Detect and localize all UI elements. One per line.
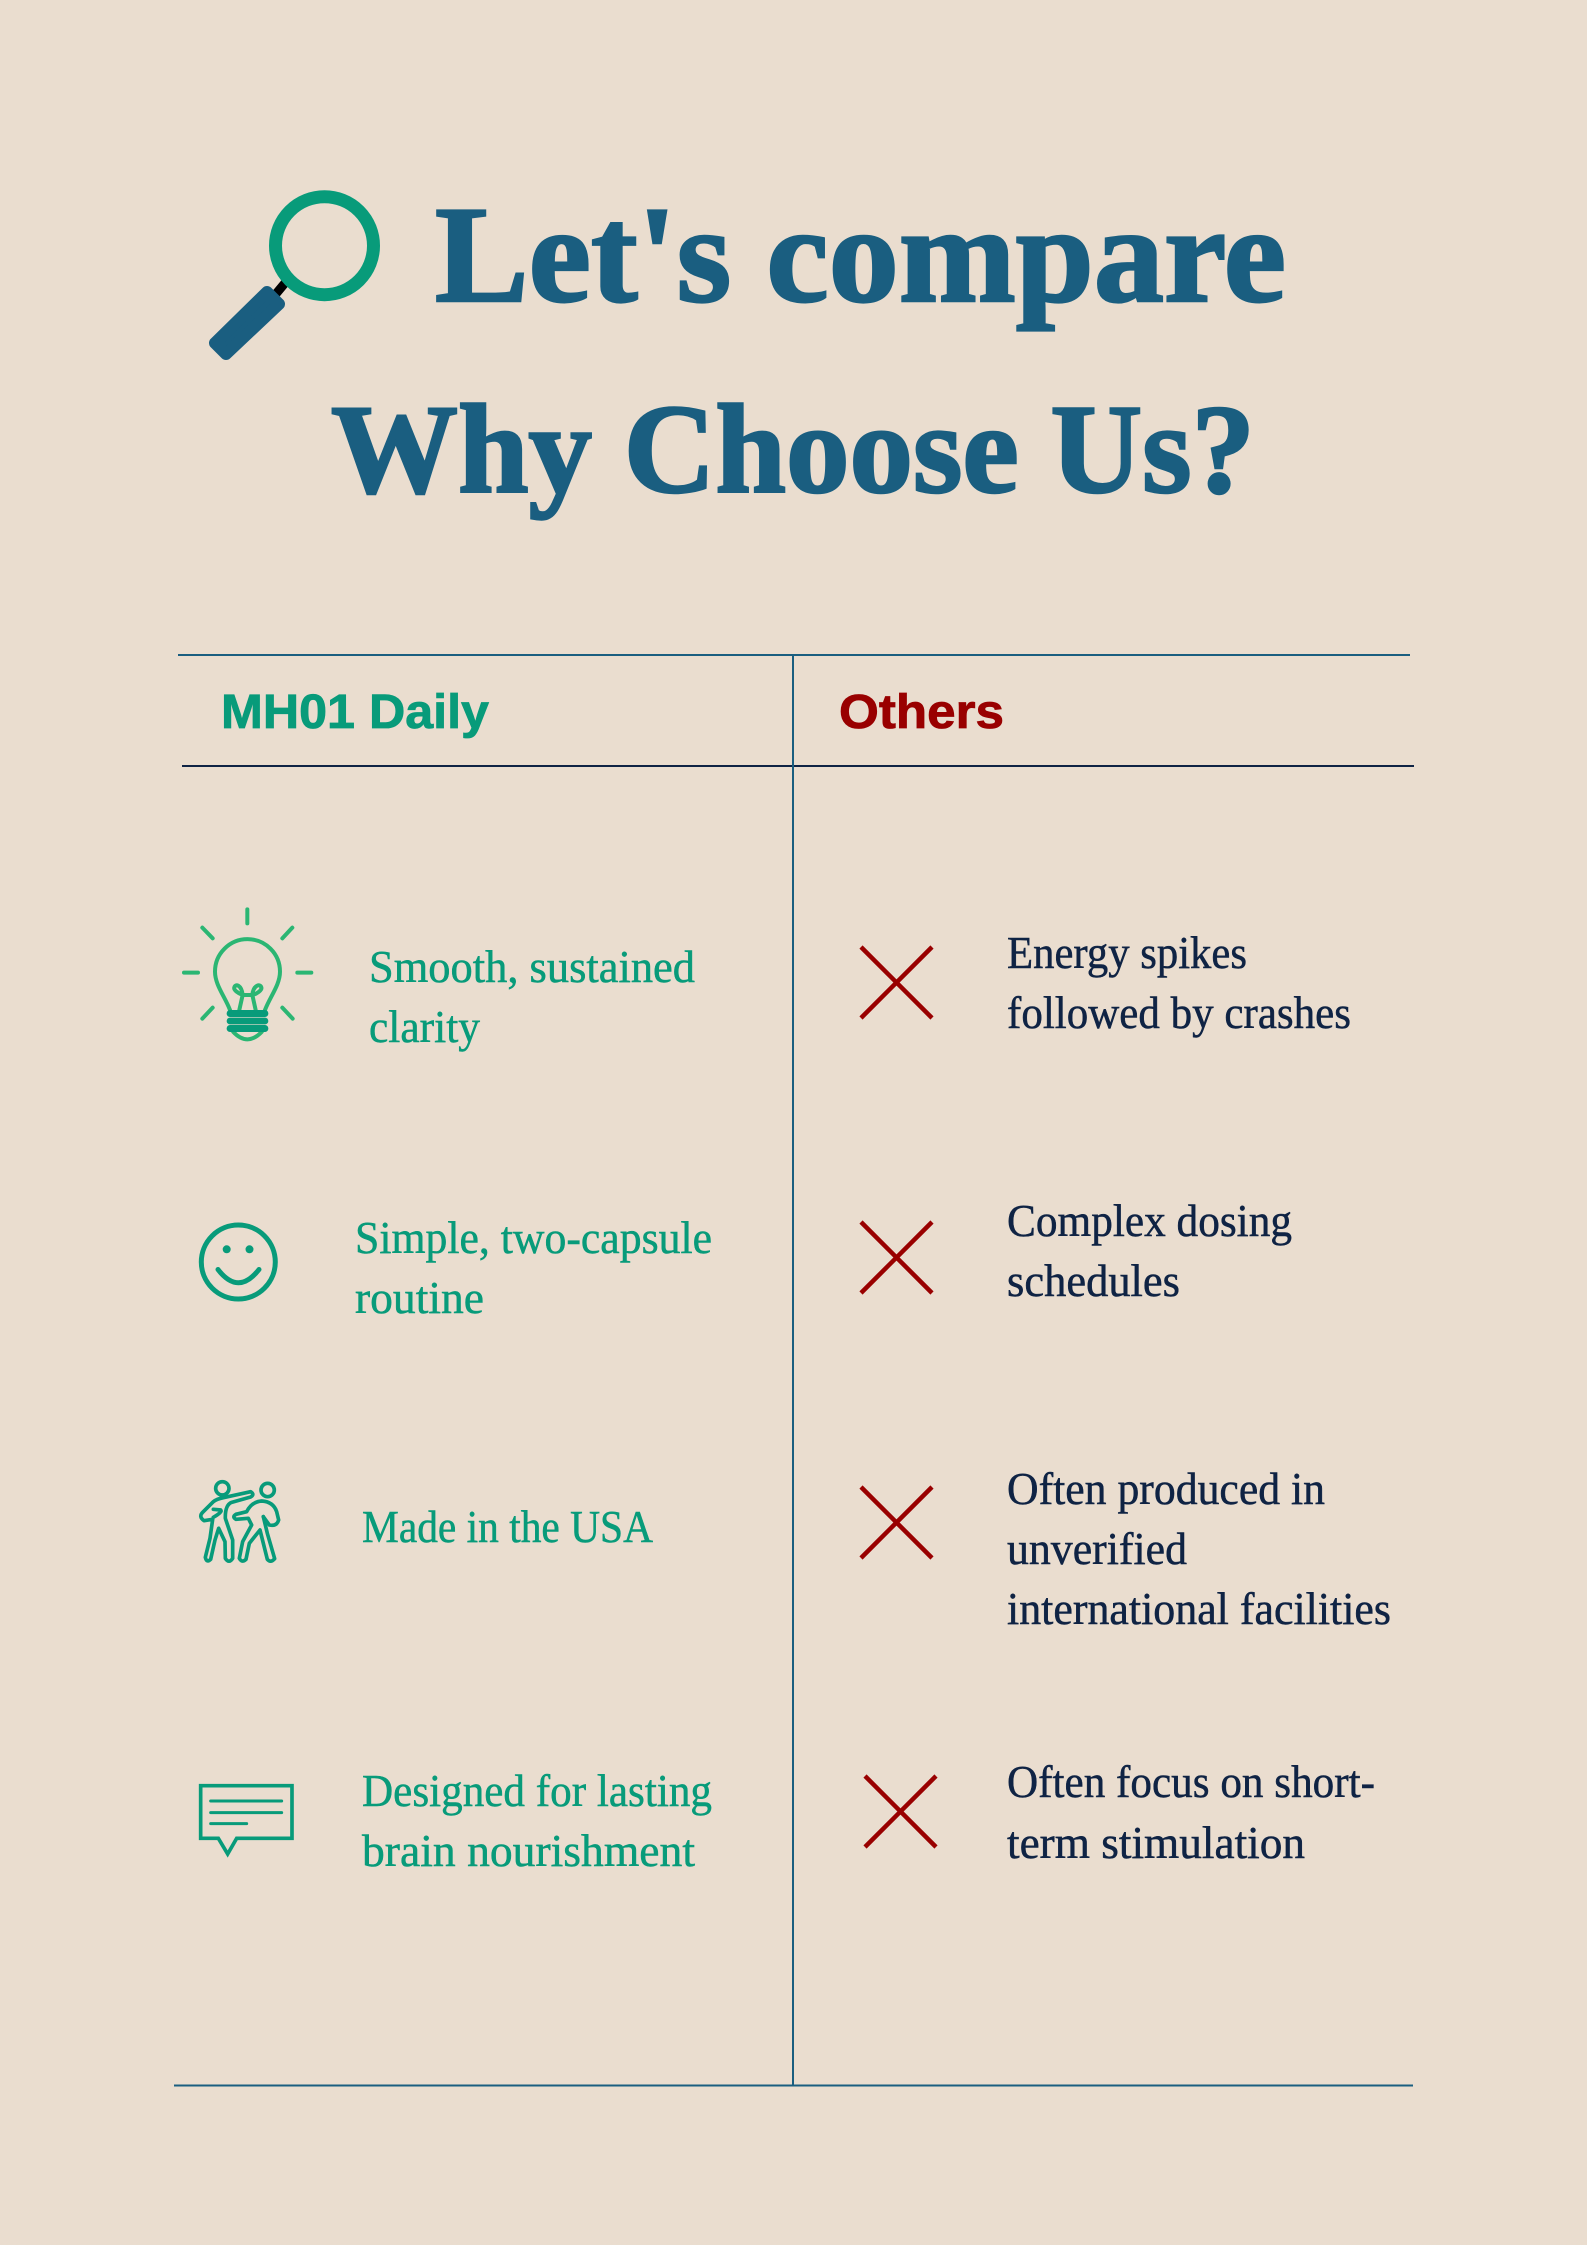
text: Often focus on short-term stimulation xyxy=(1007,1756,1375,1868)
text: Simple, two-capsule routine: routine xyxy=(355,1272,484,1323)
column heading: Others: Others xyxy=(839,686,1004,739)
text: Smooth, sustained clarity: Smooth, sustained xyxy=(369,941,695,992)
text: Complex dosing schedules xyxy=(1007,1195,1292,1306)
icon: cross 2 xyxy=(861,1222,932,1293)
text: Complex dosing schedules: Complex dosing xyxy=(1007,1195,1292,1246)
text: Often produced in unverified international facilities: international facilities xyxy=(1007,1583,1391,1634)
icon: light bulb xyxy=(184,909,311,1039)
text: Energy spikes followed by crashes: followed by crashes xyxy=(1007,987,1351,1038)
text: Complex dosing schedules: schedules xyxy=(1007,1255,1180,1306)
text: Energy spikes followed by crashes: Energy spikes xyxy=(1007,927,1247,978)
text: Smooth, sustained clarity: clarity xyxy=(369,1001,480,1052)
text: Often focus on short-term stimulation: term stimulation xyxy=(1007,1817,1305,1868)
icon: magnifying glass xyxy=(215,197,374,354)
icon: cross 4 xyxy=(865,1776,936,1847)
title: Why Choose Us?: Why Choose Us? xyxy=(331,380,1255,520)
text: Designed for lasting brain nourishment: brain nourishment xyxy=(362,1825,695,1876)
text: Smooth, sustained clarity xyxy=(369,941,695,1052)
icon: two people xyxy=(201,1482,279,1561)
column heading: MH01 Daily: MH01 Daily xyxy=(221,686,489,739)
text: Energy spikes followed by crashes xyxy=(1007,927,1351,1038)
text: Often produced in unverified international facilities: Often produced in xyxy=(1007,1463,1325,1514)
text: Designed for lasting brain nourishment: Designed for lasting xyxy=(362,1765,712,1816)
text: Often produced in unverified international facilities: unverified xyxy=(1007,1523,1187,1574)
icon: smiley face xyxy=(201,1225,275,1299)
text: Simple, two-capsule routine xyxy=(355,1212,712,1323)
text: Designed for lasting brain nourishment xyxy=(362,1765,712,1876)
text: Simple, two-capsule routine: Simple, two-capsule xyxy=(355,1212,712,1263)
text: Made in the USA: Made in the USA xyxy=(362,1501,653,1552)
text: Often produced in unverified international facilities xyxy=(1007,1463,1391,1634)
title: Let's compare: Let's compare xyxy=(435,178,1286,331)
icon: cross 3 xyxy=(861,1487,932,1558)
icon: speech bubble xyxy=(201,1786,292,1854)
icon: cross 1 xyxy=(861,947,932,1018)
text: Often focus on short-term stimulation: Often focus on short- xyxy=(1007,1756,1375,1807)
